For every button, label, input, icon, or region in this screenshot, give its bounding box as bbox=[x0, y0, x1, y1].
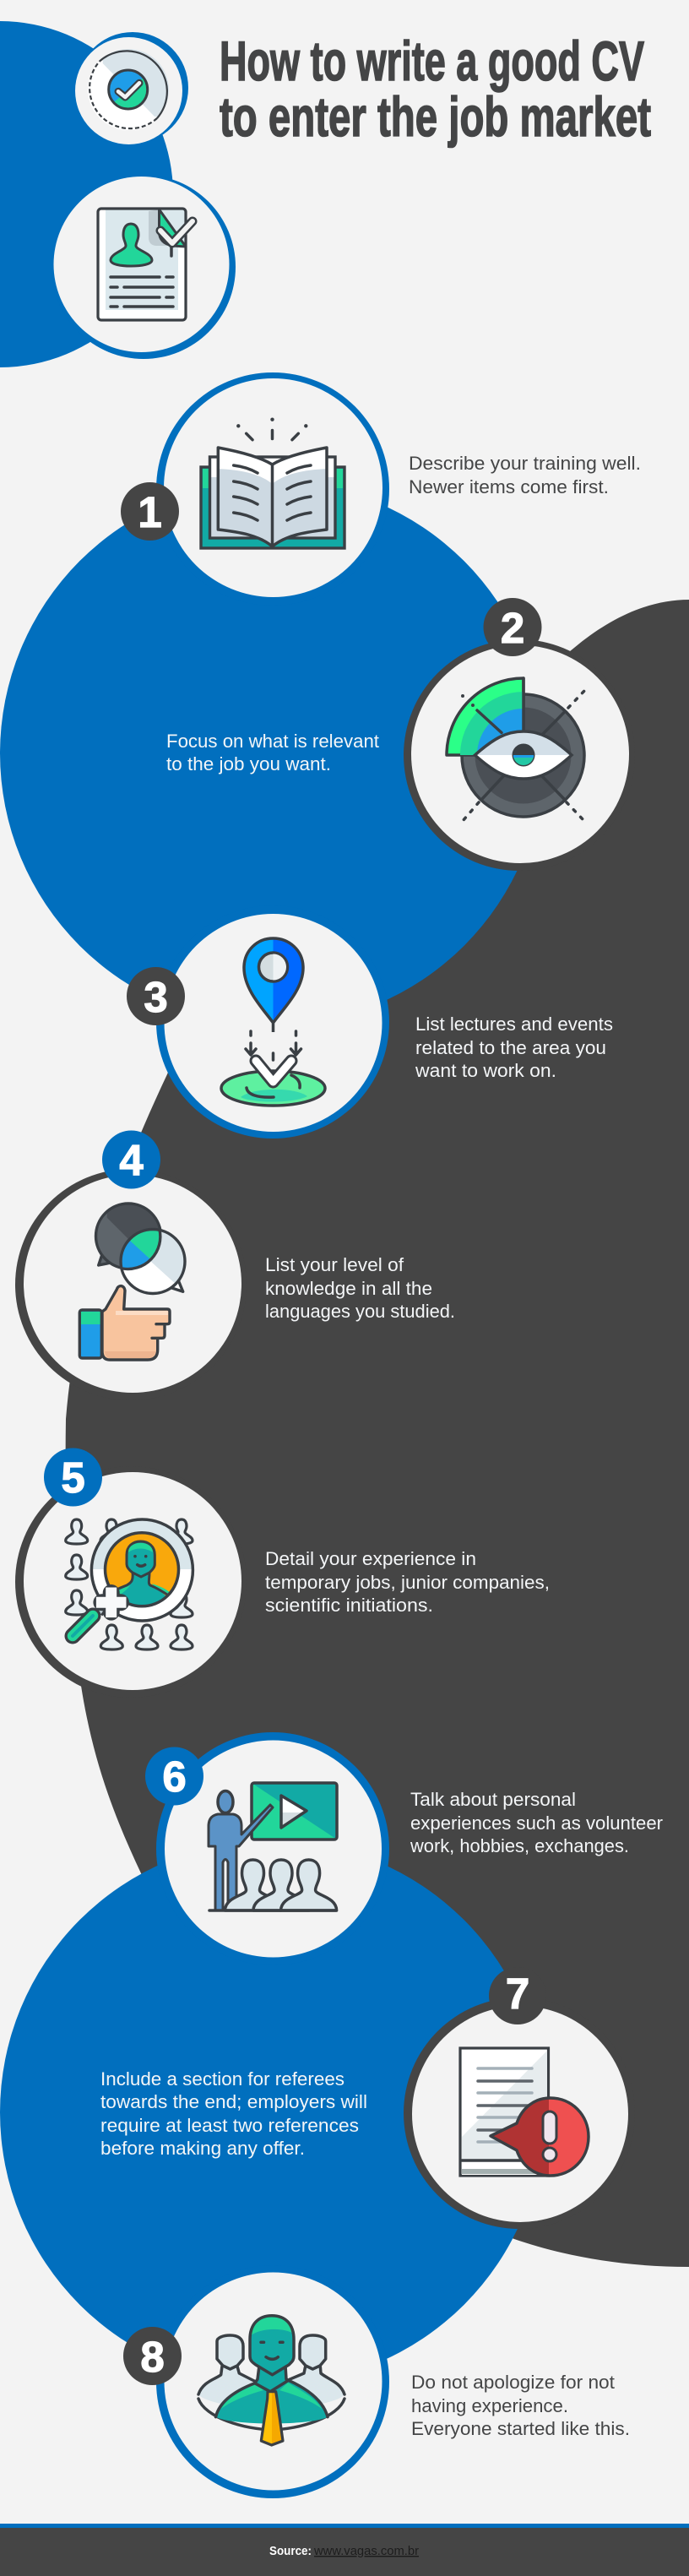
step 7 panel bbox=[404, 1997, 635, 2229]
badge 3: 3 bbox=[144, 973, 168, 1021]
header circle: verified badge bbox=[75, 32, 188, 144]
text: step 2: Focus on what is relevant bbox=[166, 731, 379, 752]
upper blue circle bbox=[0, 481, 544, 1025]
text: step 7: Include a section for referees bbox=[100, 2068, 344, 2090]
text: step 6 bbox=[410, 1789, 663, 1856]
icon: speech bubbles and thumb bbox=[79, 1199, 190, 1360]
icon: map pin bbox=[221, 933, 325, 1106]
text: step 3: related to the area you bbox=[415, 1037, 606, 1058]
text: step 7: before making any offer. bbox=[100, 2138, 305, 2159]
text: step 1: Describe your training well. bbox=[409, 453, 641, 474]
dark background shape bbox=[66, 600, 689, 2267]
badge 4 bbox=[102, 1130, 160, 1189]
icon: presenter and audience bbox=[209, 1783, 337, 1910]
badge 2: 2 bbox=[501, 604, 524, 652]
text: step 5 bbox=[265, 1548, 550, 1616]
text: step 2: to the job you want. bbox=[166, 753, 331, 774]
badge 3 bbox=[127, 967, 185, 1025]
text: step 6: work, hobbies, exchanges. bbox=[410, 1835, 629, 1856]
header circle: CV document bbox=[52, 175, 236, 359]
step 1 panel bbox=[156, 372, 389, 606]
text: step 3: List lectures and events bbox=[415, 1014, 613, 1035]
icon: team with leader bbox=[198, 2314, 344, 2445]
text: step 1 bbox=[409, 453, 641, 497]
source credit: www.vagas.com.br bbox=[313, 2545, 419, 2558]
text: step 5: Detail your experience in bbox=[265, 1548, 476, 1569]
badge 5: 5 bbox=[61, 1454, 85, 1502]
text: step 3 bbox=[415, 1014, 613, 1081]
badge 6 bbox=[145, 1747, 203, 1806]
header shape: blue half circle bbox=[0, 21, 173, 367]
step 5 panel bbox=[15, 1466, 247, 1698]
badge 5 bbox=[44, 1448, 102, 1507]
badge 1 bbox=[121, 482, 179, 541]
badge 2 bbox=[483, 598, 542, 656]
step 8 panel bbox=[156, 2265, 389, 2498]
icon: check badge bbox=[88, 49, 169, 130]
badge 8 bbox=[123, 2327, 182, 2385]
icon: open book bbox=[201, 417, 344, 549]
badge 1: 1 bbox=[138, 488, 162, 536]
badge 6: 6 bbox=[162, 1753, 187, 1801]
footer bar bbox=[0, 2524, 689, 2576]
badge 8: 8 bbox=[140, 2333, 165, 2381]
text: step 7: require at least two references bbox=[100, 2115, 359, 2136]
icon: document with alert bbox=[460, 2048, 589, 2179]
text: step 7: towards the end; employers will bbox=[100, 2091, 367, 2112]
text: step 8: Everyone started like this. bbox=[411, 2418, 630, 2439]
text: step 6: experiences such as volunteer bbox=[410, 1812, 663, 1834]
badge 7: 7 bbox=[506, 1970, 529, 2018]
text: step 1: Newer items come first. bbox=[409, 476, 609, 497]
text: step 8: Do not apologize for not bbox=[411, 2372, 615, 2393]
text: step 3: want to work on. bbox=[415, 1060, 556, 1081]
step 3 panel bbox=[156, 905, 389, 1139]
step 6 panel bbox=[156, 1732, 389, 1965]
text: step 5: scientific initiations. bbox=[265, 1595, 433, 1616]
icon: eye radar bbox=[447, 678, 584, 821]
text: step 7 bbox=[100, 2068, 367, 2159]
icon: magnifier over candidates bbox=[66, 1516, 198, 1649]
lower blue circle bbox=[0, 1840, 544, 2384]
title bbox=[220, 30, 651, 148]
step 4 panel bbox=[15, 1169, 247, 1400]
text: step 4: List your level of bbox=[265, 1254, 404, 1275]
text: step 8: having experience. bbox=[411, 2395, 568, 2416]
icon: CV with check bbox=[98, 209, 193, 320]
badge 7 bbox=[489, 1967, 546, 2024]
source credit: Source: bbox=[269, 2545, 312, 2558]
source credit bbox=[269, 2545, 419, 2558]
text: step 4: knowledge in all the bbox=[265, 1278, 432, 1299]
text: step 4: languages you studied. bbox=[265, 1301, 455, 1322]
step 2 panel bbox=[404, 639, 635, 871]
text: step 8 bbox=[411, 2372, 630, 2439]
text: step 5: temporary jobs, junior companies, bbox=[265, 1572, 550, 1593]
badge 4: 4 bbox=[119, 1136, 144, 1184]
text: step 6: Talk about personal bbox=[410, 1789, 576, 1810]
text: step 2 bbox=[166, 731, 379, 774]
text: step 4 bbox=[265, 1254, 455, 1322]
